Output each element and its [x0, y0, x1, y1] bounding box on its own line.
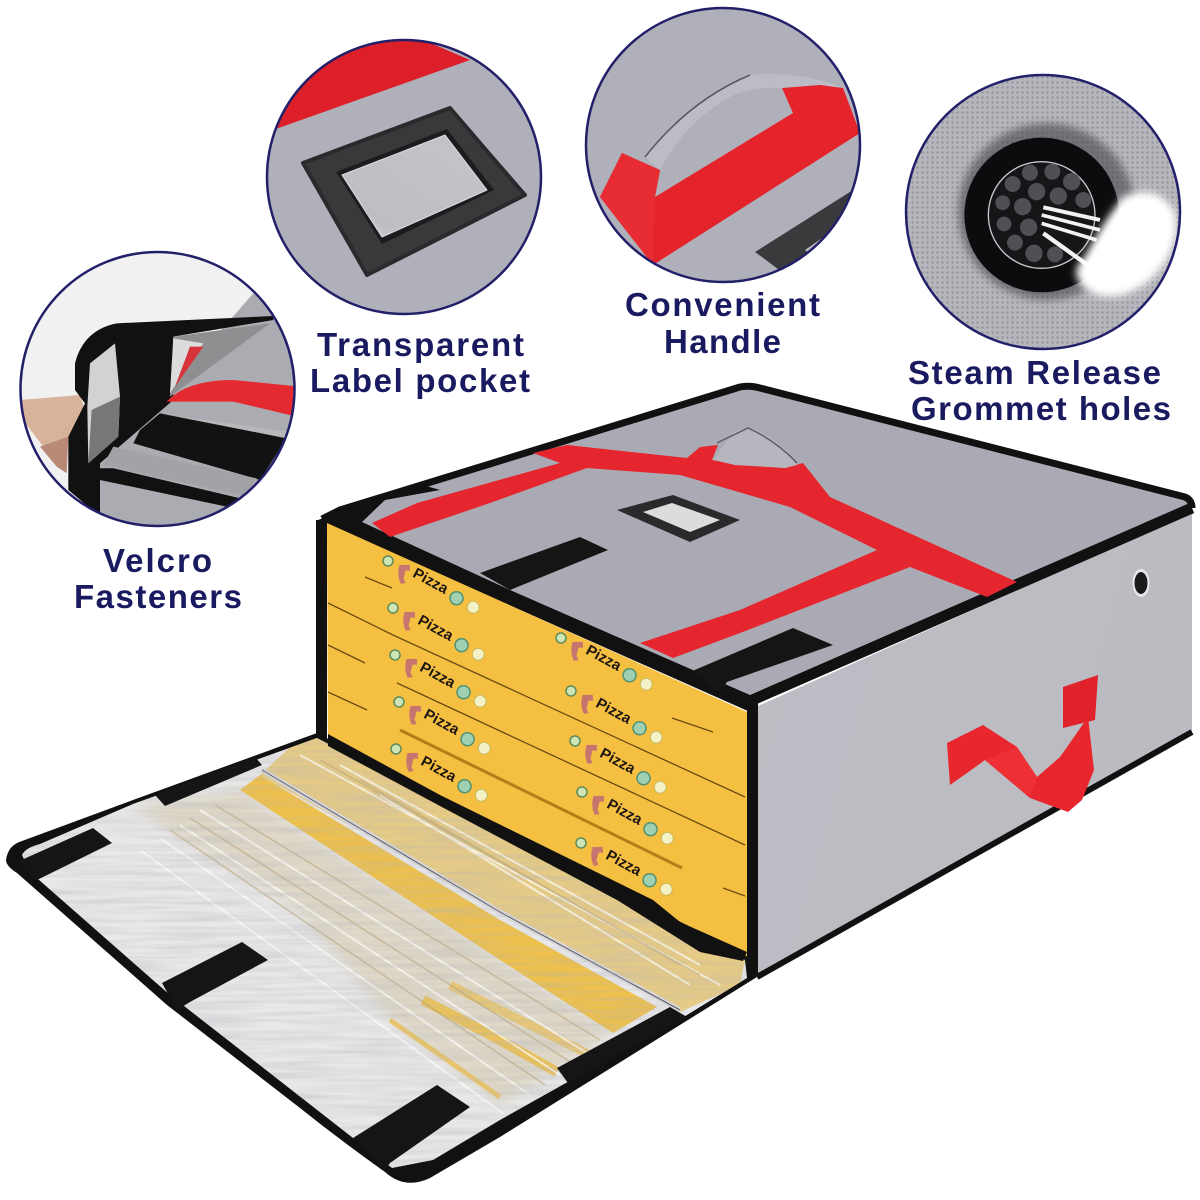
label: Convenient Handle: Handle	[664, 323, 781, 360]
side panel	[747, 512, 1192, 977]
label: Steam Release Grommet holes: Steam Release	[908, 354, 1161, 391]
side carry handle	[947, 675, 1098, 812]
flap velcro straps	[17, 757, 687, 1170]
detail circle: steam release grommet	[904, 72, 1184, 352]
pizza labels	[377, 549, 678, 904]
top panel	[318, 386, 1192, 712]
label: Convenient Handle: Convenient	[625, 286, 820, 323]
pizza boxes front	[316, 520, 747, 962]
label pocket on top	[617, 495, 740, 542]
pizza labels: Pizza	[421, 706, 463, 739]
pizza labels: Pizza	[583, 642, 625, 675]
top red straps	[372, 445, 1017, 658]
open flap with foil lining	[0, 730, 760, 1183]
pizza labels: Pizza	[417, 659, 459, 692]
pizza labels: Pizza	[603, 847, 645, 880]
pizza labels: Pizza	[604, 796, 646, 829]
top handle	[713, 428, 797, 468]
bottom rim of bag opening	[328, 734, 747, 961]
label: Transparent Label pocket: Transparent	[317, 326, 524, 363]
pizza labels: Pizza	[593, 695, 635, 728]
foil yellow reflections	[133, 738, 745, 1105]
label: Transparent Label pocket: Label pocket	[310, 362, 530, 399]
pizza labels: Pizza	[418, 753, 460, 786]
pizza labels: Pizza	[415, 612, 457, 645]
label: Steam Release Grommet holes	[908, 354, 1171, 427]
label: Velcro Fasteners: Velcro	[103, 542, 212, 579]
pizza bag illustration	[0, 386, 1192, 1183]
top rim	[322, 386, 1192, 519]
pizza labels: Pizza	[410, 565, 452, 598]
label: Convenient Handle	[625, 286, 820, 360]
detail circle: convenient handle	[584, 5, 870, 285]
label: Transparent Label pocket	[310, 326, 530, 399]
icon: side grommet hole	[1132, 569, 1150, 597]
label: Velcro Fasteners: Fasteners	[74, 578, 242, 615]
top velcro straps	[480, 537, 833, 692]
detail circle: velcro fasteners	[20, 250, 300, 530]
label: Steam Release Grommet holes: Grommet holes	[911, 390, 1171, 427]
detail circle: transparent label pocket	[260, 30, 544, 318]
pizza labels: Pizza	[597, 745, 639, 778]
label: Velcro Fasteners	[74, 542, 242, 615]
